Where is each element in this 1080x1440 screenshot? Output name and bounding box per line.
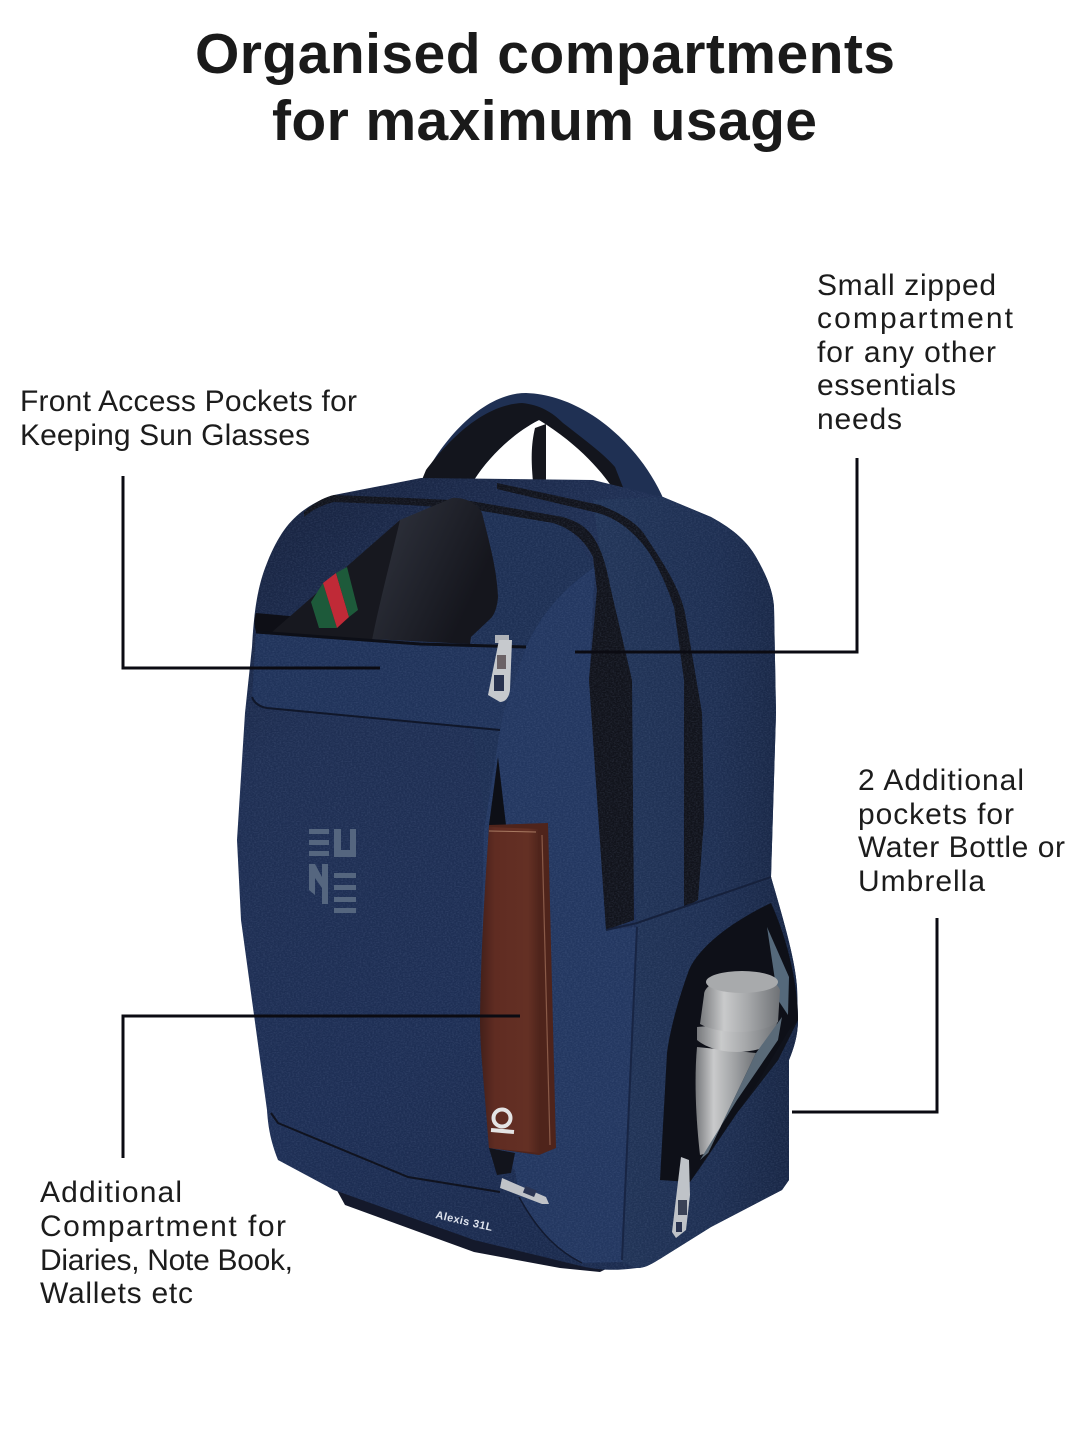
sunglass case (254, 498, 498, 644)
side bottle pocket (660, 903, 798, 1182)
side wall slit (489, 757, 506, 825)
callout: additional pockets: 2 Additional (858, 764, 1024, 797)
bag body (237, 478, 798, 1270)
fabric texture (237, 478, 797, 1270)
callout: front access pockets: Front Access Pockets for (20, 385, 357, 418)
side panel (593, 497, 798, 1268)
side zipper pull (672, 1157, 690, 1238)
title: for maximum usage (272, 89, 817, 153)
callout: additional pockets: pockets for (858, 798, 1014, 831)
callout: additional pockets: Water Bottle or (858, 831, 1065, 864)
callout: additional compartment: Additional (40, 1176, 182, 1209)
black zip stripe 1 with top seam (304, 495, 634, 930)
callout: small zipped compartment: essentials (817, 369, 956, 402)
inner back strap of handle (532, 424, 546, 482)
callout: additional pockets: Umbrella (858, 865, 985, 898)
callout line: small zipped compartment (575, 458, 857, 652)
callout: additional compartment: Compartment for (40, 1210, 286, 1243)
wallet (480, 823, 556, 1155)
callout: additional compartment: Wallets etc (40, 1277, 193, 1310)
callout: additional pockets (858, 764, 1065, 898)
gucci stripes (311, 583, 337, 628)
backpack photo illustration (230, 390, 810, 1280)
steel bottle (696, 1047, 756, 1155)
pocket lining (700, 1017, 782, 1160)
bottom seam lines (271, 1113, 500, 1192)
callout line: side pockets (792, 918, 937, 1112)
callout: small zipped compartment: compartment (817, 302, 1014, 335)
title (195, 22, 895, 153)
lower compartment zipper (489, 1148, 549, 1204)
carry handle (421, 393, 664, 508)
upper front panel (470, 505, 595, 820)
title: Organised compartments (195, 22, 895, 86)
front zipper pull (488, 635, 512, 702)
black zip stripe 2 (497, 483, 704, 908)
wallet logo (491, 1110, 514, 1132)
brand logo EUME (309, 829, 356, 913)
callout: small zipped compartment: needs (817, 403, 902, 436)
callout: front access pockets (20, 385, 357, 452)
callout: small zipped compartment (817, 269, 1014, 436)
callout: additional compartment: Diaries, Note Book, (40, 1244, 293, 1277)
front pocket flap (252, 632, 526, 730)
callout: additional compartment (40, 1176, 293, 1310)
bottom shadow strap (334, 1185, 620, 1272)
pocket zip line (256, 632, 526, 647)
callout: small zipped compartment: Small zipped (817, 269, 996, 302)
callout: front access pockets: Keeping Sun Glasses (20, 419, 310, 452)
callout line: sunglasses pocket (123, 476, 380, 668)
model label: Alexis 31L (434, 1209, 494, 1234)
callout line: additional compartment (123, 1016, 520, 1158)
callout: small zipped compartment: for any other (817, 336, 996, 369)
